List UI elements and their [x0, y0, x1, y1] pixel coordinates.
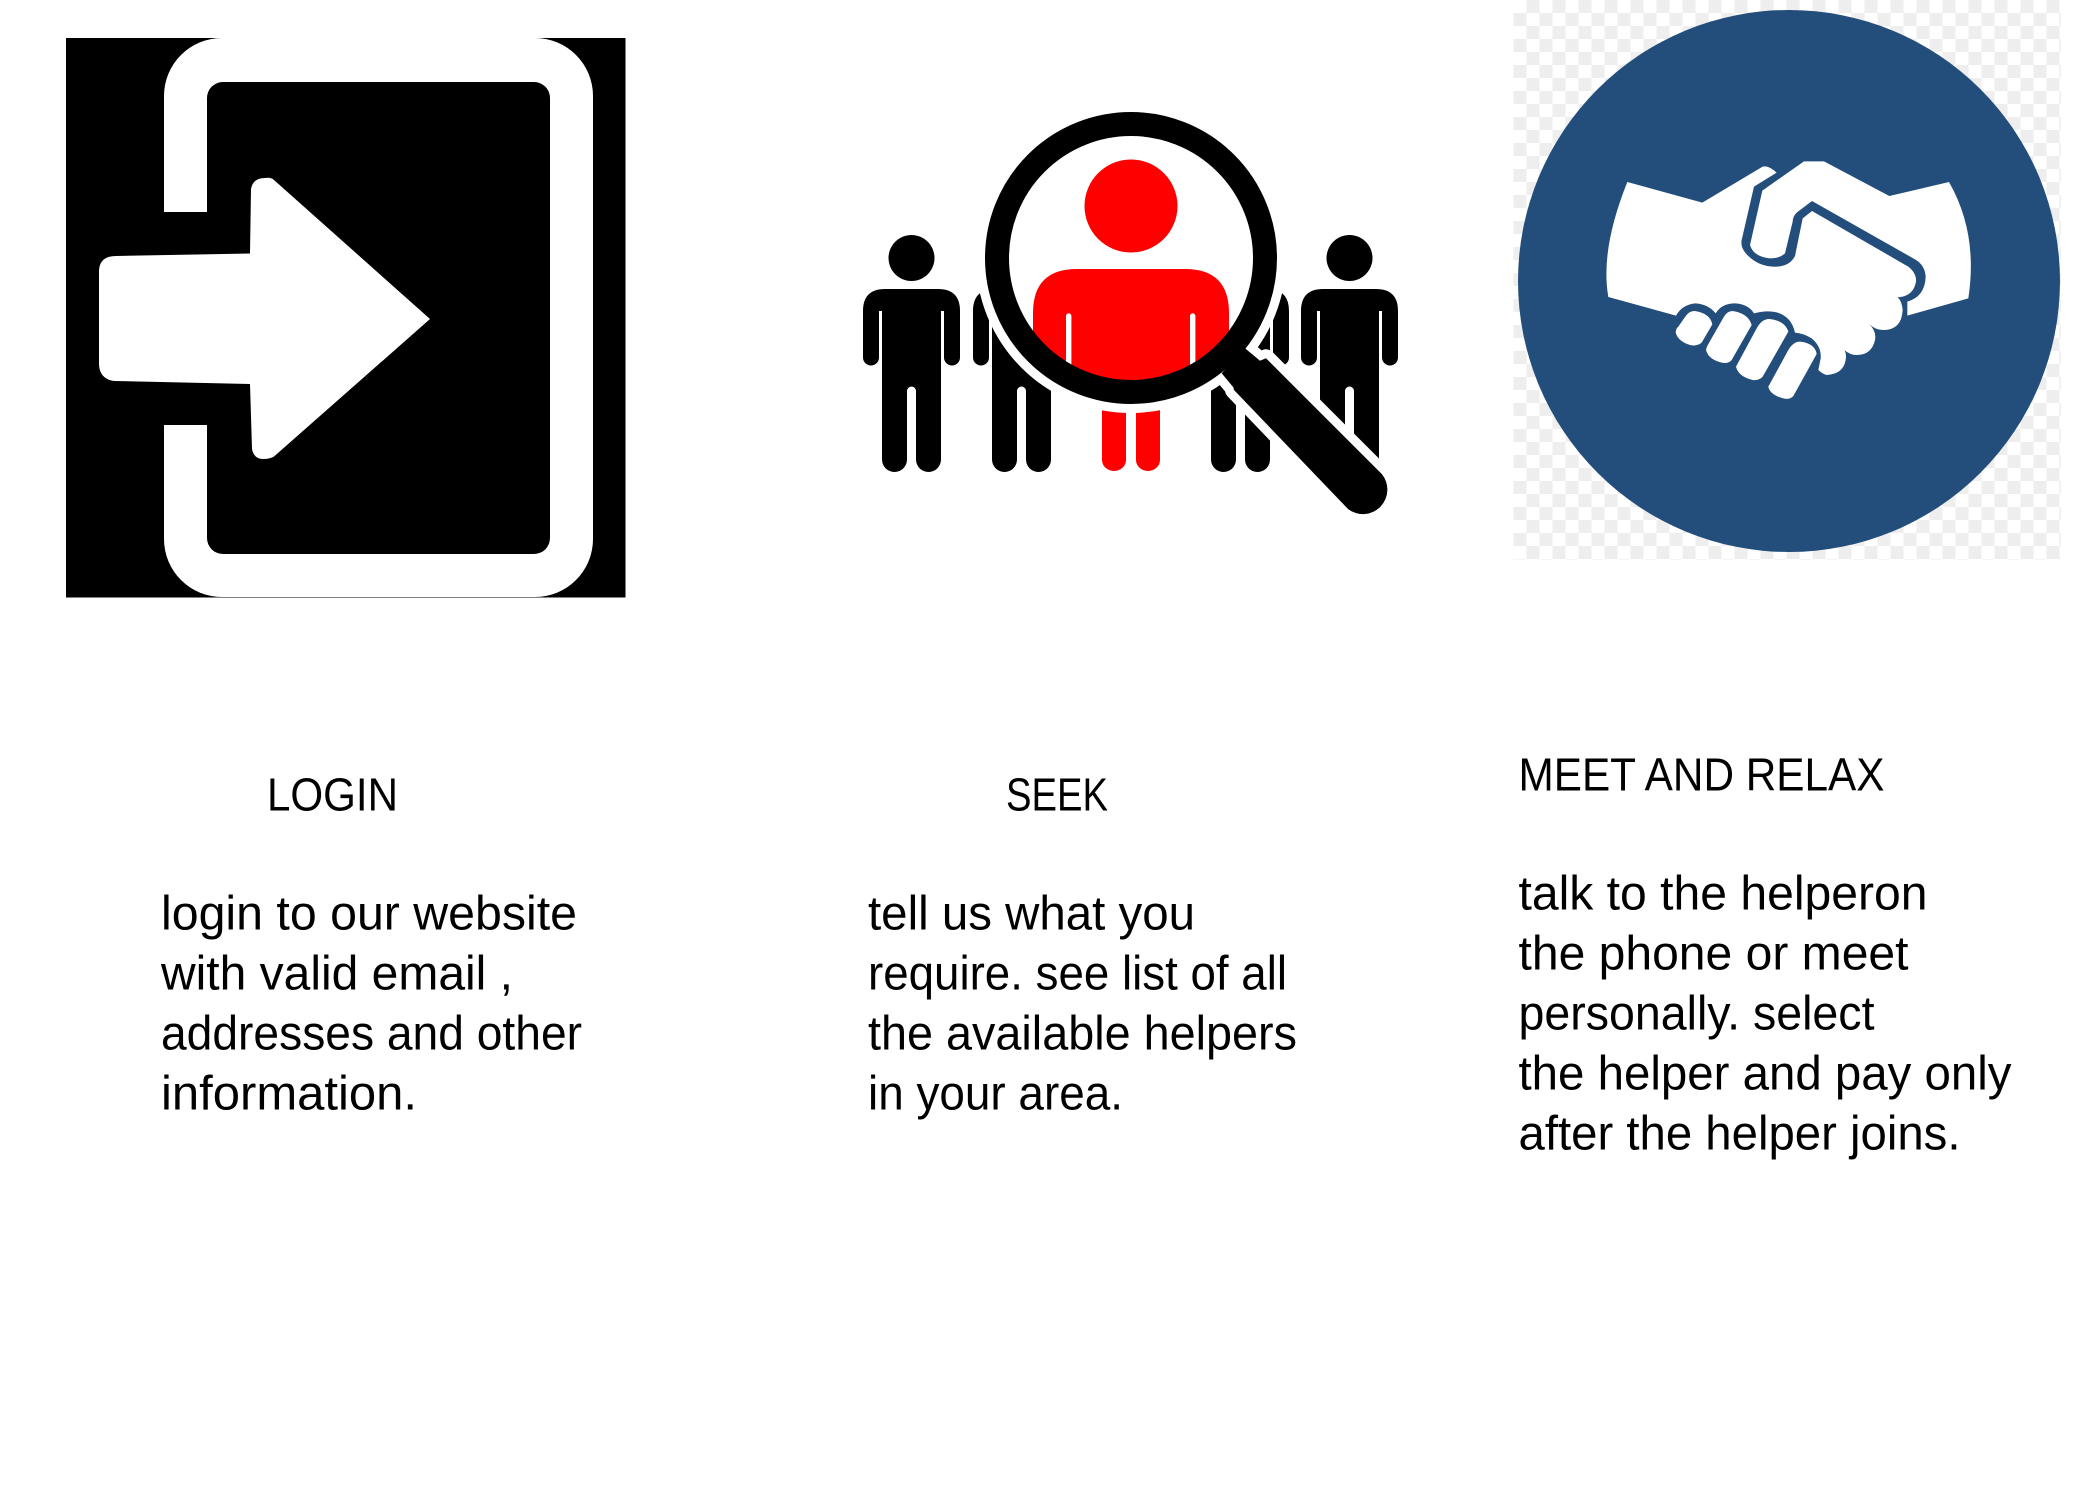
- text: seek description: [868, 888, 1297, 1120]
- panel: login: [66, 38, 626, 1120]
- icon: magnifier over people: [863, 103, 1398, 514]
- text: meet and relax description: after the helper joins.: [1518, 1108, 1960, 1160]
- person: second right: [1192, 289, 1289, 472]
- icon part: magnifier: [997, 124, 1387, 514]
- icon: handshake in blue circle: [1514, 0, 2061, 560]
- text: login description: with valid email ,: [160, 948, 513, 1000]
- text: login description: information.: [161, 1068, 417, 1120]
- text: seek description: tell us what you: [868, 888, 1195, 940]
- icon: login door with arrow: [66, 38, 626, 598]
- text: seek description: require. see list of all: [868, 948, 1287, 1000]
- text: meet and relax description: the helper and pay only: [1518, 1048, 2012, 1100]
- person: highlighted red: [980, 160, 1282, 471]
- text: login description: login to our website: [161, 888, 577, 940]
- heading: MEET AND RELAX: MEET AND RELAX: [1518, 748, 1884, 800]
- person: second left: [973, 289, 1070, 472]
- text: login description: [160, 888, 582, 1120]
- text: seek description: the available helpers: [868, 1008, 1297, 1060]
- text: meet and relax description: [1518, 868, 2012, 1160]
- text: seek description: in your area.: [868, 1068, 1123, 1120]
- text: meet and relax description: the phone or meet: [1518, 928, 1908, 980]
- heading: LOGIN: LOGIN: [267, 768, 398, 820]
- panel: seek: [863, 103, 1398, 1120]
- person: far left: [863, 235, 960, 472]
- heading: SEEK: SEEK: [1006, 768, 1108, 820]
- text: login description: addresses and other: [161, 1008, 582, 1060]
- text: meet and relax description: personally. select: [1518, 988, 1874, 1040]
- text: meet and relax description: talk to the helperon: [1518, 868, 1928, 920]
- panel: meet and relax: [1514, 0, 2061, 1160]
- person: far right: [1301, 235, 1398, 472]
